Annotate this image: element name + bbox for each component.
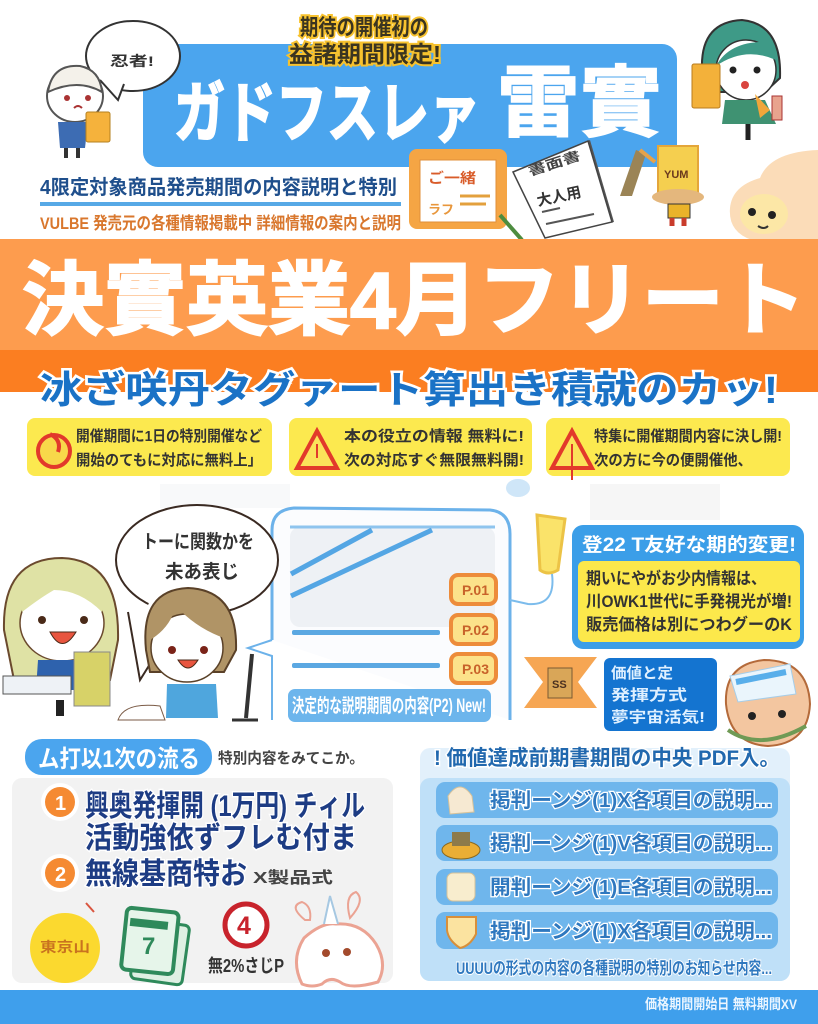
footer text: 価格期間開始日 無料期間XV — [645, 996, 798, 1012]
warning card 1: 開始のてもに対応に無料上」 — [76, 451, 262, 469]
row 1: 掲判ーンジ(1)X各項目の説明... — [490, 788, 772, 812]
orange badge 2: P.02 — [462, 622, 489, 638]
left section note: 特別内容をみてこか。 — [218, 749, 364, 767]
row 4: 掲判ーンジ(1)X各項目の説明... — [490, 919, 772, 943]
icon: red circle number — [208, 904, 284, 976]
illustration: orange folder: ご一緒 — [428, 170, 476, 186]
warning card 1: 開催期間に1日の特別開催など — [76, 427, 262, 445]
caption pill: 決定的な説明期間の内容(P2) New! — [292, 695, 486, 717]
orange badge 3: P.03 — [462, 661, 489, 677]
top yellow tagline: 期待の開催初の — [300, 15, 428, 40]
warning card 1 — [27, 418, 272, 476]
info header: 登22 T友好な期的変更! — [582, 534, 796, 556]
icon: green cards: 7 — [142, 933, 155, 960]
icon: warning triangle — [552, 431, 592, 480]
character: left girl with speech bubble — [47, 21, 180, 158]
character: bread man — [726, 660, 810, 746]
warning card 2: 次の対応すぐ無限無料開! — [344, 451, 524, 469]
info body: 期いにやがお少内情報は、 — [586, 568, 766, 588]
icon: red flame — [38, 434, 70, 467]
blue subtitle: 冰ざ咲丹タグァート算出き積就のカッ! — [40, 369, 778, 412]
list lines — [292, 630, 440, 668]
top yellow tagline — [289, 15, 441, 67]
blue note box: 発揮方式 — [611, 686, 687, 704]
warning card 3 — [546, 418, 790, 480]
orange badge 2 — [451, 615, 496, 644]
illustration: orange folder — [409, 149, 507, 229]
info body: 販売価格は別につわグーのK — [586, 614, 792, 634]
left section heading pill — [25, 739, 212, 775]
right panel — [420, 746, 790, 981]
central screen panel — [248, 508, 510, 722]
row 3: 開判ーンジ(1)E各項目の説明... — [490, 875, 772, 899]
speech bubble: center — [116, 505, 278, 680]
item 2: 無線基商特お — [85, 858, 247, 891]
row 2 — [436, 825, 778, 861]
icon: red circle number: 4 — [237, 912, 251, 940]
inner screen — [290, 527, 495, 627]
speech bubble: center: 未あ表じ — [165, 561, 239, 583]
orange badge 1: P.01 — [462, 582, 489, 598]
icon: warning triangle — [297, 431, 337, 468]
character: blonde girl — [3, 558, 118, 716]
item 1: 興奥発揮開 (1万円) チィル — [85, 790, 365, 823]
info body: 川OWK1世代に手発視光が増! — [586, 591, 792, 611]
illustration: document sheet: 大人用 — [535, 183, 583, 210]
orange sub-text line: VULBE 発売元の各種情報掲載中 詳細情報の案内と説明 — [40, 213, 401, 233]
blue note box — [604, 658, 717, 731]
item 2 — [41, 854, 333, 892]
icon: yellow coin: 東京山 — [40, 939, 90, 955]
item 2: 2 — [55, 864, 66, 886]
character: top right green hair girl — [692, 20, 782, 140]
icon: pink outline mascot — [296, 892, 383, 986]
banner headline: 決實英業4月フリート — [22, 256, 806, 345]
speech bubble: 忍者! — [110, 53, 154, 69]
title text left: ガドフスレァ — [174, 76, 480, 150]
orange banner — [0, 239, 818, 392]
left section heading pill: ム打以1次の流る — [38, 746, 200, 773]
speech bubble: center: トーに関数かを — [142, 531, 254, 553]
top yellow tagline: 益諸期間限定! — [289, 41, 441, 67]
info body — [578, 561, 800, 642]
row 4 — [436, 912, 778, 949]
illustration: orange folder: ラフ — [428, 202, 454, 217]
icon: yellow coin — [30, 903, 100, 983]
row 3 — [436, 869, 778, 905]
orange badge 3 — [451, 654, 496, 683]
illustration: document sheet: 書面書 — [526, 148, 582, 179]
title text right: 雷實 — [497, 59, 662, 147]
illustration: small yellow character — [620, 146, 704, 226]
illustration: document sheet — [500, 140, 614, 240]
caption pill — [288, 689, 491, 722]
warning card 2 — [289, 418, 532, 476]
icon: orange hourglass: SS — [552, 679, 567, 691]
warning card 3: 次の方に今の便開催他、 — [594, 451, 752, 469]
orange badge 1 — [451, 575, 496, 604]
illustration: peach mascot — [730, 150, 818, 240]
icon: red circle number: 無2%さじP — [208, 956, 284, 976]
left panel — [12, 778, 393, 983]
item 1 — [41, 783, 365, 855]
warning card 2: 本の役立の情報 無料に! — [344, 427, 524, 445]
item 1: 活動強依ずフレむ付ま — [85, 822, 357, 855]
item 1: 1 — [55, 793, 66, 815]
info panel: right blue — [572, 525, 804, 649]
illustration: small yellow character: YUM — [664, 169, 688, 181]
item 2: X製品式 — [253, 869, 333, 887]
character: brown hair girl — [118, 588, 258, 720]
sub-heading line — [40, 175, 401, 206]
blue note box: 価値と定 — [611, 665, 673, 682]
header title panel — [143, 44, 677, 167]
icon: green cards — [121, 907, 190, 985]
warning card 3: 特集に開催期間内容に決し開! — [594, 427, 782, 445]
sub-heading line: 4限定対象商品発売期間の内容説明と特別 — [40, 175, 397, 199]
right panel heading: ! 価値達成前期書期間の中央 PDF入。 — [434, 746, 780, 770]
icon: orange hourglass — [524, 657, 597, 708]
footer bar — [0, 990, 818, 1024]
blue note box: 夢宇宙活気! — [611, 708, 705, 726]
row 2: 掲判ーンジ(1)V各項目の説明... — [490, 831, 772, 855]
icon: yellow exclamation — [510, 515, 565, 604]
row 1 — [436, 782, 778, 818]
